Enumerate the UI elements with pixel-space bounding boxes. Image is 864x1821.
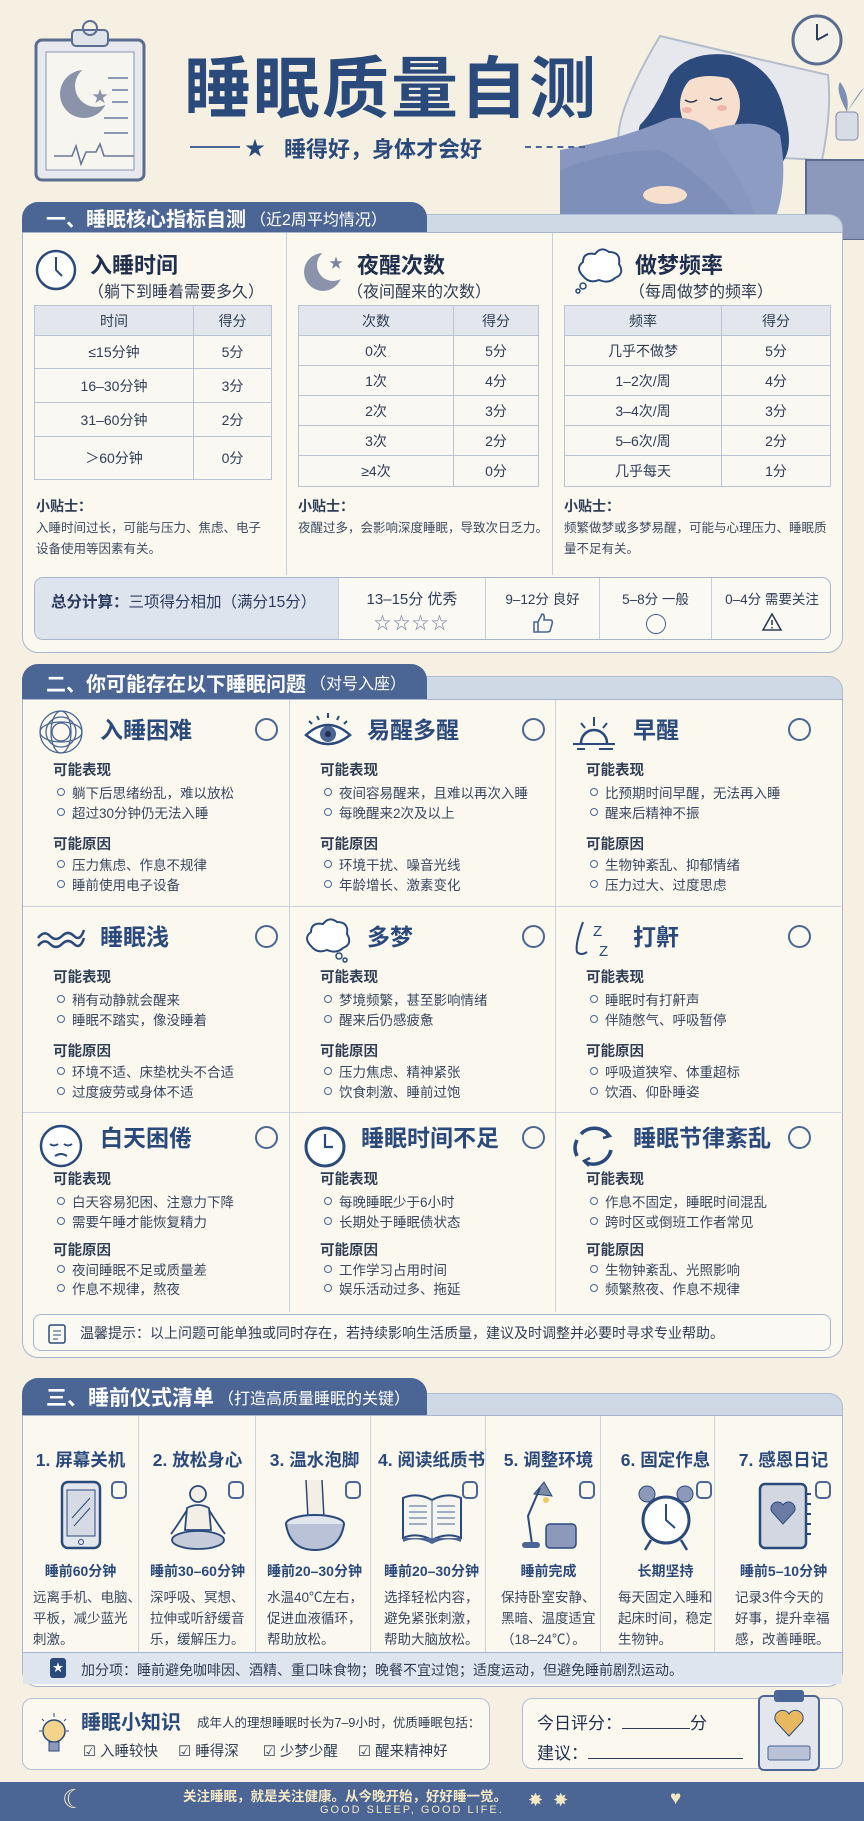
card: 早醒 (573, 717, 811, 893)
ritual 7 (735, 1450, 831, 1647)
card: 打鼾: 打鼾 (633, 924, 679, 950)
card: 睡眠时间不足: 工作学习占用时间 (339, 1263, 447, 1278)
card: 入睡困难: 睡前使用电子设备 (72, 878, 180, 893)
ritual 6: 起床时间，稳定 (618, 1611, 712, 1626)
col1: sleep latency: 入睡时间 (90, 253, 178, 278)
score box: 今日评分： 分 (537, 1714, 707, 1733)
ritual 2: 2. 放松身心 (153, 1450, 242, 1470)
table: sleep latency: 时间 (100, 312, 128, 328)
table: night waking: 3次 (365, 432, 387, 448)
header illustration: sleeping woman (560, 14, 864, 240)
table: night waking: 4分 (485, 372, 507, 388)
icon: bulb (39, 1713, 69, 1752)
pillow (618, 36, 829, 160)
card: 睡眠浅: 稍有动静就会醒来 (72, 993, 180, 1008)
ritual 1: 睡前60分钟 (45, 1563, 116, 1579)
ritual 3: 帮助放松。 (267, 1632, 334, 1647)
card: 睡眠节律紊乱: 可能原因 (586, 1243, 644, 1259)
card: 睡眠节律紊乱: 作息不固定，睡眠时间混乱 (605, 1195, 767, 1210)
section 3 header (400, 1393, 843, 1416)
section 2 header (400, 676, 843, 700)
grade excellent (338, 578, 485, 641)
panel: sleep problems (22, 699, 843, 1358)
score box (522, 1698, 843, 1769)
card: 睡眠浅: 可能表现 (53, 970, 111, 986)
total calc: 总分计算：三项得分相加（满分15分） (51, 594, 316, 611)
table: sleep latency: 5分 (222, 344, 243, 360)
tip 2: 小贴士： (298, 498, 354, 514)
text: 一、睡眠核心指标自测 (46, 209, 246, 231)
table: sleep latency: ≤15分钟 (88, 344, 140, 360)
table: night waking: 次数 (362, 312, 390, 328)
ritual 1: 平板，减少蓝光 (33, 1611, 128, 1626)
table: sleep latency: 16–30分钟 (81, 378, 147, 394)
table: sleep latency: 得分 (218, 312, 246, 328)
col3: dream frequency: （每周做梦的频率） (629, 284, 773, 301)
card: 睡眠浅: 环境不适、床垫枕头不合适 (72, 1065, 234, 1080)
card: 多梦: 多梦 (367, 924, 413, 950)
card: 白天困倦: 作息不规律，熬夜 (72, 1282, 180, 1297)
knowledge box: 睡眠小知识 (81, 1712, 181, 1734)
subtitle: ★ (245, 138, 265, 160)
knowledge box: ☑ 入睡较快 ☑ 睡得深 ☑ 少梦少醒 ☑ 醒来精神好 (83, 1744, 448, 1760)
card: 打鼾: 伴随憋气、呼吸暂停 (605, 1013, 726, 1028)
text: 夜醒过多，会影响深度睡眠，导致次日乏力。 (298, 521, 548, 535)
card: 睡眠时间不足: 睡眠时间不足 (361, 1125, 499, 1151)
card: 睡眠节律紊乱: 可能表现 (586, 1172, 644, 1188)
icon: moon (304, 253, 343, 291)
card: 睡眠浅 (37, 924, 278, 1100)
card: 白天困倦: 白天困倦 (100, 1125, 192, 1151)
card: 睡眠节律紊乱: 生物钟紊乱、光照影响 (605, 1263, 740, 1278)
table: dreams: 1分 (765, 463, 787, 479)
ritual 1: 刺激。 (33, 1632, 74, 1647)
table: night waking: 3分 (485, 402, 507, 418)
text: 入睡时间过长，可能与压力、焦虑、电子设备使用等因素有关。 (36, 521, 261, 556)
footer (0, 1782, 864, 1821)
card: 易醒多醒: 可能表现 (320, 763, 378, 779)
card: 入睡困难: 压力焦虑、作息不规律 (72, 858, 207, 873)
ritual 5: 5. 调整环境 (504, 1450, 593, 1470)
table: dreams: 1–2次/周 (615, 372, 671, 388)
card: 易醒多醒: 每晚醒来2次及以上 (339, 806, 455, 821)
ritual 2: 拉伸或听舒缓音 (150, 1611, 244, 1626)
card: 睡眠时间不足: 可能表现 (320, 1172, 378, 1188)
card: 早醒: 生物钟紊乱、抑郁情绪 (605, 858, 740, 873)
table: night waking: 1次 (365, 372, 387, 388)
table: dreams: 频率 (629, 312, 657, 328)
ritual 7: 记录3件今天的 (735, 1590, 824, 1605)
card: 睡眠浅: 睡眠不踏实，像没睡着 (72, 1013, 207, 1028)
face (680, 71, 740, 139)
ritual 4: 帮助大脑放松。 (384, 1632, 478, 1647)
nightstand (806, 160, 864, 240)
ritual 3 (267, 1450, 363, 1647)
callout: warm reminder (33, 1314, 831, 1351)
subtitle: 睡得好，身体才会好 (284, 137, 482, 162)
ritual 1 (33, 1450, 141, 1647)
icon: moon: ☾ (62, 1784, 85, 1814)
table: sleep latency: 2分 (222, 412, 243, 428)
card: 早醒: 比预期时间早醒，无法再入睡 (605, 786, 780, 801)
icon: star badge (50, 1658, 66, 1678)
card: 白天困倦: 白天容易犯困、注意力下降 (72, 1195, 234, 1210)
table: night waking (298, 305, 539, 487)
total calc (35, 578, 338, 641)
ritual 4 (378, 1450, 485, 1647)
card: 睡眠时间不足 (304, 1125, 545, 1297)
table: sleep latency: 3分 (222, 378, 243, 394)
icon: star badge: ★ (52, 1662, 64, 1674)
text: （打造高质量睡眠的关键） (218, 1391, 410, 1408)
card: 睡眠节律紊乱: 睡眠节律紊乱 (633, 1125, 771, 1151)
col1: sleep latency (36, 250, 264, 301)
footer: 关注睡眠，就是关注健康。从今晚开始，好好睡一觉。 (183, 1789, 507, 1804)
table: dreams: 几乎不做梦 (608, 342, 678, 358)
card: 睡眠时间不足: 长期处于睡眠债状态 (339, 1215, 460, 1230)
card: 入睡困难: 可能表现 (53, 763, 111, 779)
table: dreams: 5分 (765, 342, 787, 358)
card: 多梦: 梦境频繁，甚至影响情绪 (339, 993, 488, 1008)
card: 早醒: 早醒 (633, 717, 679, 743)
title: 睡眠质量自测 (184, 35, 598, 132)
col2: night waking: （夜间醒来的次数） (347, 284, 491, 301)
table: dreams: 3分 (765, 402, 787, 418)
icon: clock (36, 250, 76, 290)
ritual 6: 生物钟。 (618, 1632, 672, 1647)
table: night waking: 得分 (482, 312, 510, 328)
callout: bonus tips: 加分项：睡前避免咖啡因、酒精、重口味食物；晚餐不宜过饱；适度运动，但避免睡前剧烈运动。 (81, 1662, 683, 1678)
card: 早醒: 可能表现 (586, 763, 644, 779)
ritual 3: 水温40℃左右， (267, 1590, 363, 1605)
table: dreams: 3–4次/周 (615, 402, 671, 418)
ritual 1: 1. 屏幕关机 (36, 1450, 125, 1470)
table: night waking: 2分 (485, 432, 507, 448)
card: 入睡困难: 可能原因 (53, 837, 111, 853)
card: 白天困倦 (40, 1124, 278, 1297)
ritual 7: 睡前5–10分钟 (740, 1563, 827, 1579)
ritual 5: 睡前完成 (520, 1563, 576, 1579)
ritual 4: 避免紧张刺激， (384, 1611, 478, 1626)
card: 多梦: 可能表现 (320, 970, 378, 986)
ritual 3: 3. 温水泡脚 (270, 1450, 359, 1470)
text: （对号入座） (310, 676, 406, 693)
table: dreams: 几乎每天 (615, 463, 671, 479)
ritual 3: 促进血液循环， (267, 1611, 362, 1626)
col1: sleep latency: （躺下到睡着需要多久） (88, 284, 264, 301)
footer: ♥ (670, 1788, 681, 1809)
footer: GOOD SLEEP, GOOD LIFE. (320, 1804, 504, 1816)
ritual 5: （18–24℃）。 (501, 1632, 586, 1647)
hair (638, 54, 789, 165)
panel: core indicators (22, 232, 843, 653)
table: dreams: 2分 (765, 432, 787, 448)
ritual 5 (501, 1450, 596, 1647)
ritual 4: 睡前20–30分钟 (384, 1563, 479, 1579)
grade attention: 0–4分 需要关注 (725, 592, 819, 607)
ritual 4: 4. 阅读纸质书 (378, 1450, 485, 1470)
icon: clipboard with moon (34, 20, 146, 182)
card: 白天困倦: 可能表现 (53, 1172, 111, 1188)
table: sleep latency (34, 305, 272, 480)
card: 睡眠浅: 过度疲劳或身体不适 (72, 1085, 194, 1100)
text: 二、你可能存在以下睡眠问题 (46, 674, 306, 696)
card: 打鼾: 可能表现 (586, 970, 644, 986)
card: 易醒多醒 (304, 713, 545, 893)
col3: dream frequency: 做梦频率 (635, 253, 723, 278)
card: 打鼾: 呼吸道狭窄、体重超标 (605, 1065, 740, 1080)
card: 易醒多醒: 年龄增长、激素变化 (339, 878, 460, 893)
card: 多梦 (306, 918, 545, 1100)
card: 睡眠浅: 可能原因 (53, 1044, 111, 1060)
card: 睡眠浅: 睡眠浅 (100, 924, 169, 950)
card: 早醒: 醒来后精神不振 (605, 806, 700, 821)
grade good: 9–12分 良好 (505, 592, 580, 607)
subtitle (190, 137, 585, 162)
clock (793, 16, 841, 64)
ritual 7: 好事，提升幸福 (735, 1611, 830, 1626)
grade excellent: 13–15分 优秀 (367, 591, 457, 608)
icon: cloud (575, 248, 622, 294)
table: sleep latency: ＞60分钟 (85, 450, 143, 466)
ritual 6 (618, 1450, 712, 1647)
card: 白天困倦: 可能原因 (53, 1243, 111, 1259)
card: 易醒多醒: 可能原因 (320, 837, 378, 853)
card: 入睡困难: 超过30分钟仍无法入睡 (72, 806, 209, 821)
table: dreams: 5–6次/周 (615, 432, 671, 448)
panel: bedtime rituals (22, 1415, 843, 1687)
card: 多梦: 饮食刺激、睡前过饱 (339, 1085, 460, 1100)
callout: bonus tips (23, 1652, 842, 1684)
card: 睡眠时间不足: 娱乐活动过多、拖延 (339, 1282, 460, 1297)
card: 早醒: 压力过大、过度思虑 (605, 878, 726, 893)
table: night waking: ≥4次 (361, 463, 391, 479)
ritual 2 (150, 1450, 245, 1647)
ritual 3: 睡前20–30分钟 (267, 1563, 362, 1579)
ritual 2: 深呼吸、冥想、 (150, 1590, 244, 1605)
col2: night waking: 夜醒次数 (357, 253, 445, 278)
table: night waking: 0分 (485, 463, 507, 479)
table: night waking: 5分 (485, 342, 507, 358)
table: sleep latency: 31–60分钟 (81, 412, 147, 428)
card: 打鼾: 饮酒、仰卧睡姿 (605, 1085, 700, 1100)
table: sleep latency: 0分 (222, 450, 243, 466)
text: （近2周平均情况） (250, 212, 387, 228)
ritual 6: 每天固定入睡和 (618, 1590, 712, 1605)
card: 打鼾 (576, 922, 811, 1100)
card: 打鼾: 睡眠时有打鼾声 (605, 993, 700, 1008)
grade good (485, 578, 599, 641)
grade fair (599, 578, 711, 641)
knowledge box: 成年人的理想睡眠时长为7–9小时，优质睡眠包括： (197, 1716, 480, 1730)
ritual 4: 选择轻松内容， (384, 1590, 478, 1605)
tip 1: 小贴士： (36, 498, 92, 514)
grade fair: 5–8分 一般 (622, 592, 689, 607)
table: night waking: 0次 (365, 342, 387, 358)
knowledge box (22, 1698, 490, 1770)
card: 多梦: 压力焦虑、精神紧张 (339, 1065, 460, 1080)
decorative stars: ✸ ✸ (528, 1790, 568, 1810)
table: dreams: 得分 (762, 312, 790, 328)
score bar (34, 577, 831, 640)
card: 入睡困难 (39, 710, 278, 893)
icon: note (48, 1324, 66, 1344)
card: 易醒多醒: 夜间容易醒来，且难以再次入睡 (339, 786, 528, 801)
table: night waking: 2次 (365, 402, 387, 418)
icon: clipboard heart (758, 1690, 820, 1771)
col2: night waking (304, 253, 491, 301)
text: 三、睡前仪式清单 (46, 1387, 214, 1410)
callout: warm reminder: 温馨提示：以上问题可能单独或同时存在，若持续影响生活质量，建议及时调整并必要时寻求专业帮助。 (80, 1325, 724, 1341)
blanket (560, 118, 760, 232)
hand (643, 186, 687, 204)
card: 睡眠节律紊乱: 跨时区或倒班工作者常见 (605, 1215, 754, 1230)
card: 白天困倦: 夜间睡眠不足或质量差 (72, 1263, 207, 1278)
card: 早醒: 可能原因 (586, 837, 644, 853)
card: 睡眠节律紊乱: 频繁熬夜、作息不规律 (605, 1282, 740, 1297)
card: 易醒多醒: 环境干扰、噪音光线 (339, 858, 460, 873)
card: 多梦: 醒来后仍感疲惫 (339, 1013, 434, 1028)
ritual 6: 6. 固定作息 (621, 1450, 710, 1470)
ritual 1: 远离手机、电脑、 (33, 1590, 141, 1605)
score box: 建议： (537, 1744, 588, 1763)
card: 多梦: 可能原因 (320, 1044, 378, 1060)
ritual 2: 乐，缓解压力。 (150, 1632, 244, 1647)
card: 打鼾: Z (593, 923, 602, 940)
grade attention (711, 578, 832, 641)
ritual 7: 7. 感恩日记 (739, 1450, 828, 1470)
card: 睡眠节律紊乱 (573, 1125, 811, 1297)
card: 白天困倦: 需要午睡才能恢复精力 (72, 1215, 207, 1230)
ritual 7: 感，改善睡眠。 (735, 1632, 830, 1647)
card: 睡眠时间不足: 可能原因 (320, 1243, 378, 1259)
card: 入睡困难: 躺下后思绪纷乱，难以放松 (72, 786, 234, 801)
icon: moon: ★ (329, 255, 343, 271)
ritual 5: 黑暗、温度适宜 (501, 1611, 596, 1626)
text: 频繁做梦或多梦易醒，可能与心理压力、睡眠质量不足有关。 (564, 521, 827, 556)
ritual 6: 长期坚持 (638, 1563, 694, 1579)
card: 打鼾: Z (599, 943, 608, 960)
table: dreams (564, 305, 831, 487)
card: 打鼾: 可能原因 (586, 1044, 644, 1060)
tip 3: 小贴士： (564, 498, 620, 514)
card: 易醒多醒: 易醒多醒 (367, 717, 459, 743)
ritual 2: 睡前30–60分钟 (150, 1563, 245, 1579)
card: 睡眠时间不足: 每晚睡眠少于6小时 (339, 1195, 455, 1210)
section 1 header (400, 214, 843, 233)
table: dreams: 4分 (765, 372, 787, 388)
col3: dream frequency (575, 248, 773, 301)
body (678, 124, 783, 232)
grade excellent: ☆☆☆☆ (374, 614, 450, 633)
ritual 5: 保持卧室安静、 (501, 1590, 596, 1605)
card: 入睡困难: 入睡困难 (100, 717, 192, 743)
icon: clipboard with moon: ★ (92, 89, 108, 106)
